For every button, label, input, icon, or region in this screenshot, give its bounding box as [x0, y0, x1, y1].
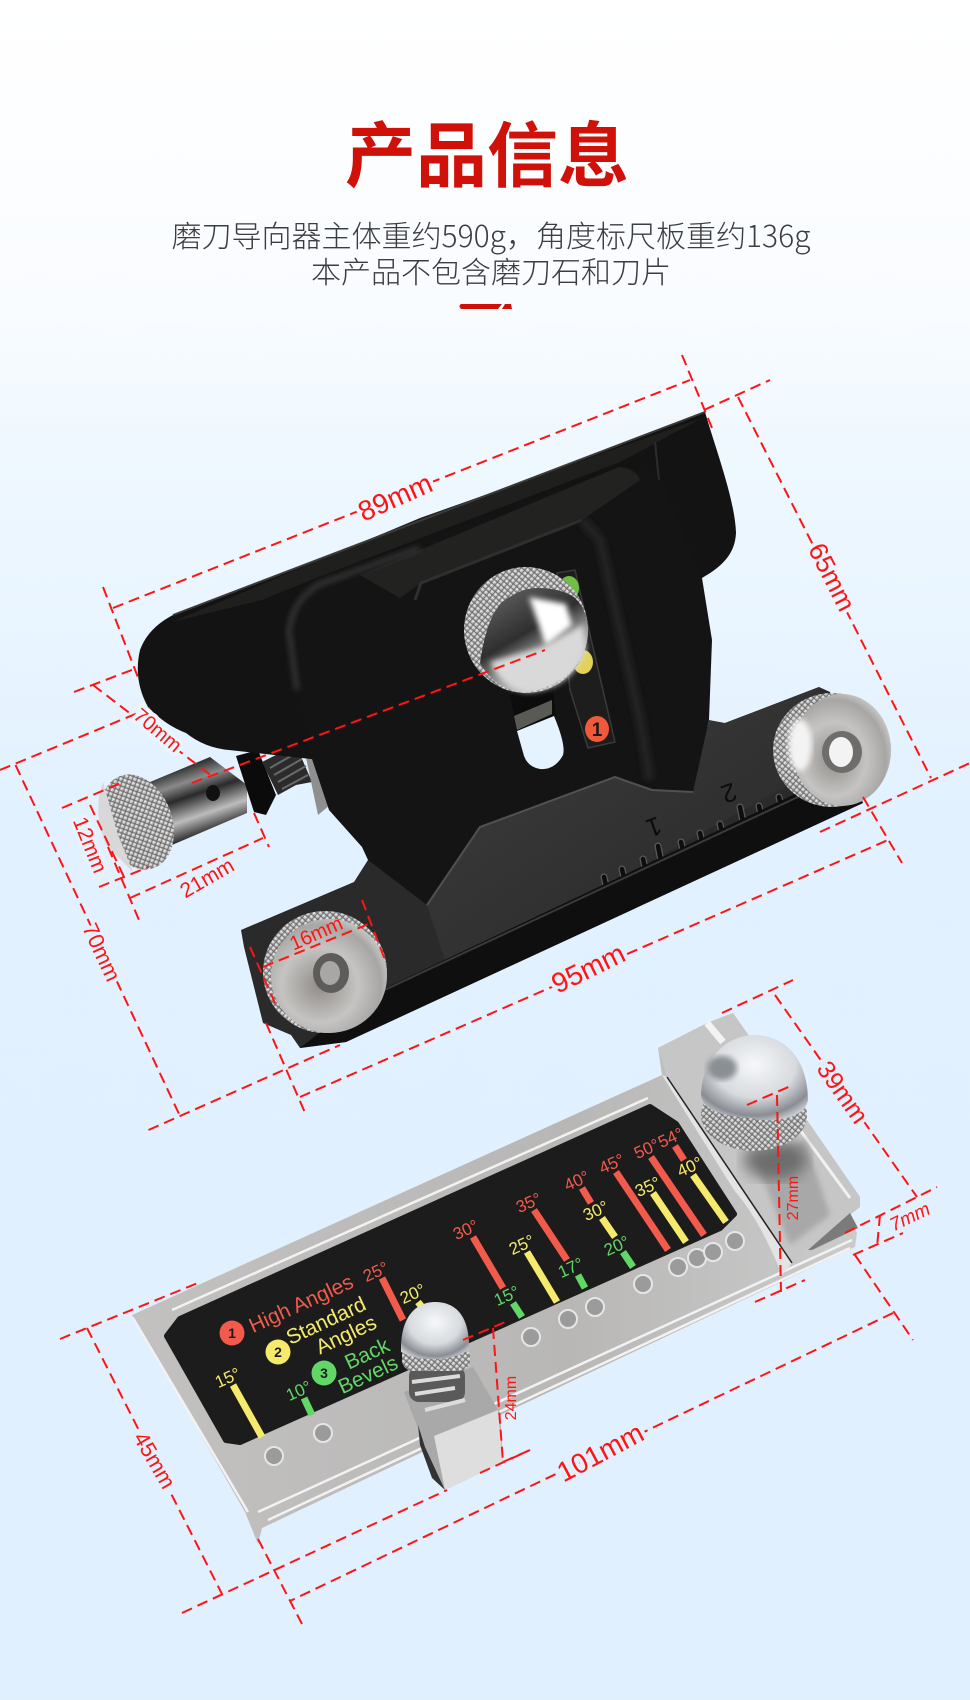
legend: Bevels [335, 1351, 402, 1399]
7mm: 7mm [887, 1199, 934, 1236]
legend: Back [341, 1334, 394, 1374]
large 70mm: 70mm [77, 919, 126, 985]
angle labels: 20° [601, 1232, 632, 1260]
89mm: 89mm [353, 467, 437, 527]
title: 产品信息 [345, 100, 629, 202]
legend: High Angles [246, 1270, 357, 1338]
angle labels: 10° [283, 1377, 314, 1405]
65mm: 65mm [802, 538, 862, 616]
plate edge highlights [133, 1098, 852, 1520]
black sharpening guide body [87, 412, 891, 1048]
top knurled knob [464, 567, 588, 693]
angle labels: 30° [450, 1216, 481, 1244]
description text [172, 212, 810, 292]
dimension lines [0, 355, 970, 1624]
angle labels: 17° [555, 1254, 586, 1282]
ramp panel [427, 687, 835, 960]
legend: 3 [320, 1365, 328, 1381]
front plate [285, 467, 712, 905]
screws [265, 1232, 744, 1465]
silver angle scale plate [132, 1013, 860, 1544]
24mm: 24mm [503, 1376, 520, 1420]
21mm: 21mm [176, 854, 238, 903]
scale digits: 2 [717, 776, 741, 810]
description text: 本产品不包含磨刀石和刀片 [311, 248, 671, 292]
shoulder band [360, 467, 640, 598]
rear rim [172, 418, 702, 622]
12mm: 12mm [68, 814, 111, 877]
red accent bar [460, 304, 512, 309]
lower left knurled knob [263, 911, 387, 1033]
rear body [138, 412, 736, 760]
angle labels [212, 1124, 705, 1405]
16mm: 16mm [287, 913, 346, 955]
101mm: 101mm [552, 1417, 649, 1488]
plate ridge highlights [289, 548, 420, 690]
legend: Angles [312, 1311, 380, 1359]
angle labels: 45° [596, 1150, 627, 1178]
right knob [701, 1035, 808, 1151]
angle labels: 15° [212, 1364, 243, 1392]
angle labels: 15° [491, 1282, 522, 1310]
right knurled knob [773, 693, 891, 807]
angle labels: 54° [655, 1124, 686, 1152]
description text: 磨刀导向器主体重约590g，角度标尺板重约136g [172, 212, 810, 256]
scale digits [642, 776, 741, 844]
27mm: 27mm [785, 1176, 802, 1220]
small 70mm: 70mm [129, 704, 186, 757]
legend [220, 1270, 402, 1399]
end block [658, 1013, 860, 1275]
center slider [401, 1302, 503, 1490]
dimension labels [68, 467, 934, 1493]
angle window [557, 570, 615, 748]
angle labels: 40° [561, 1167, 592, 1195]
angle labels: 50° [631, 1135, 662, 1163]
angle labels: 25° [506, 1231, 537, 1259]
angle window: 1 [592, 720, 603, 741]
slot opening [510, 680, 564, 769]
rail base [241, 687, 863, 1048]
plate body [132, 1013, 860, 1544]
black angle panel [167, 1107, 734, 1442]
scale ticks [604, 797, 782, 890]
95mm: 95mm [546, 937, 630, 999]
angle labels: 30° [580, 1197, 611, 1225]
angle labels: 20° [397, 1280, 428, 1308]
legend: 2 [274, 1344, 282, 1360]
legend: Standard [283, 1293, 370, 1350]
angle labels: 35° [632, 1173, 663, 1201]
legend: 1 [228, 1325, 236, 1341]
scale digits: 1 [642, 810, 666, 844]
angle labels: 25° [360, 1258, 391, 1286]
angle bars [233, 1146, 726, 1437]
45mm: 45mm [128, 1428, 181, 1493]
angle labels: 35° [513, 1189, 544, 1217]
side thumb screw [87, 745, 330, 880]
rail lip [300, 775, 863, 1048]
39mm: 39mm [811, 1056, 874, 1129]
angle labels: 40° [674, 1153, 705, 1181]
